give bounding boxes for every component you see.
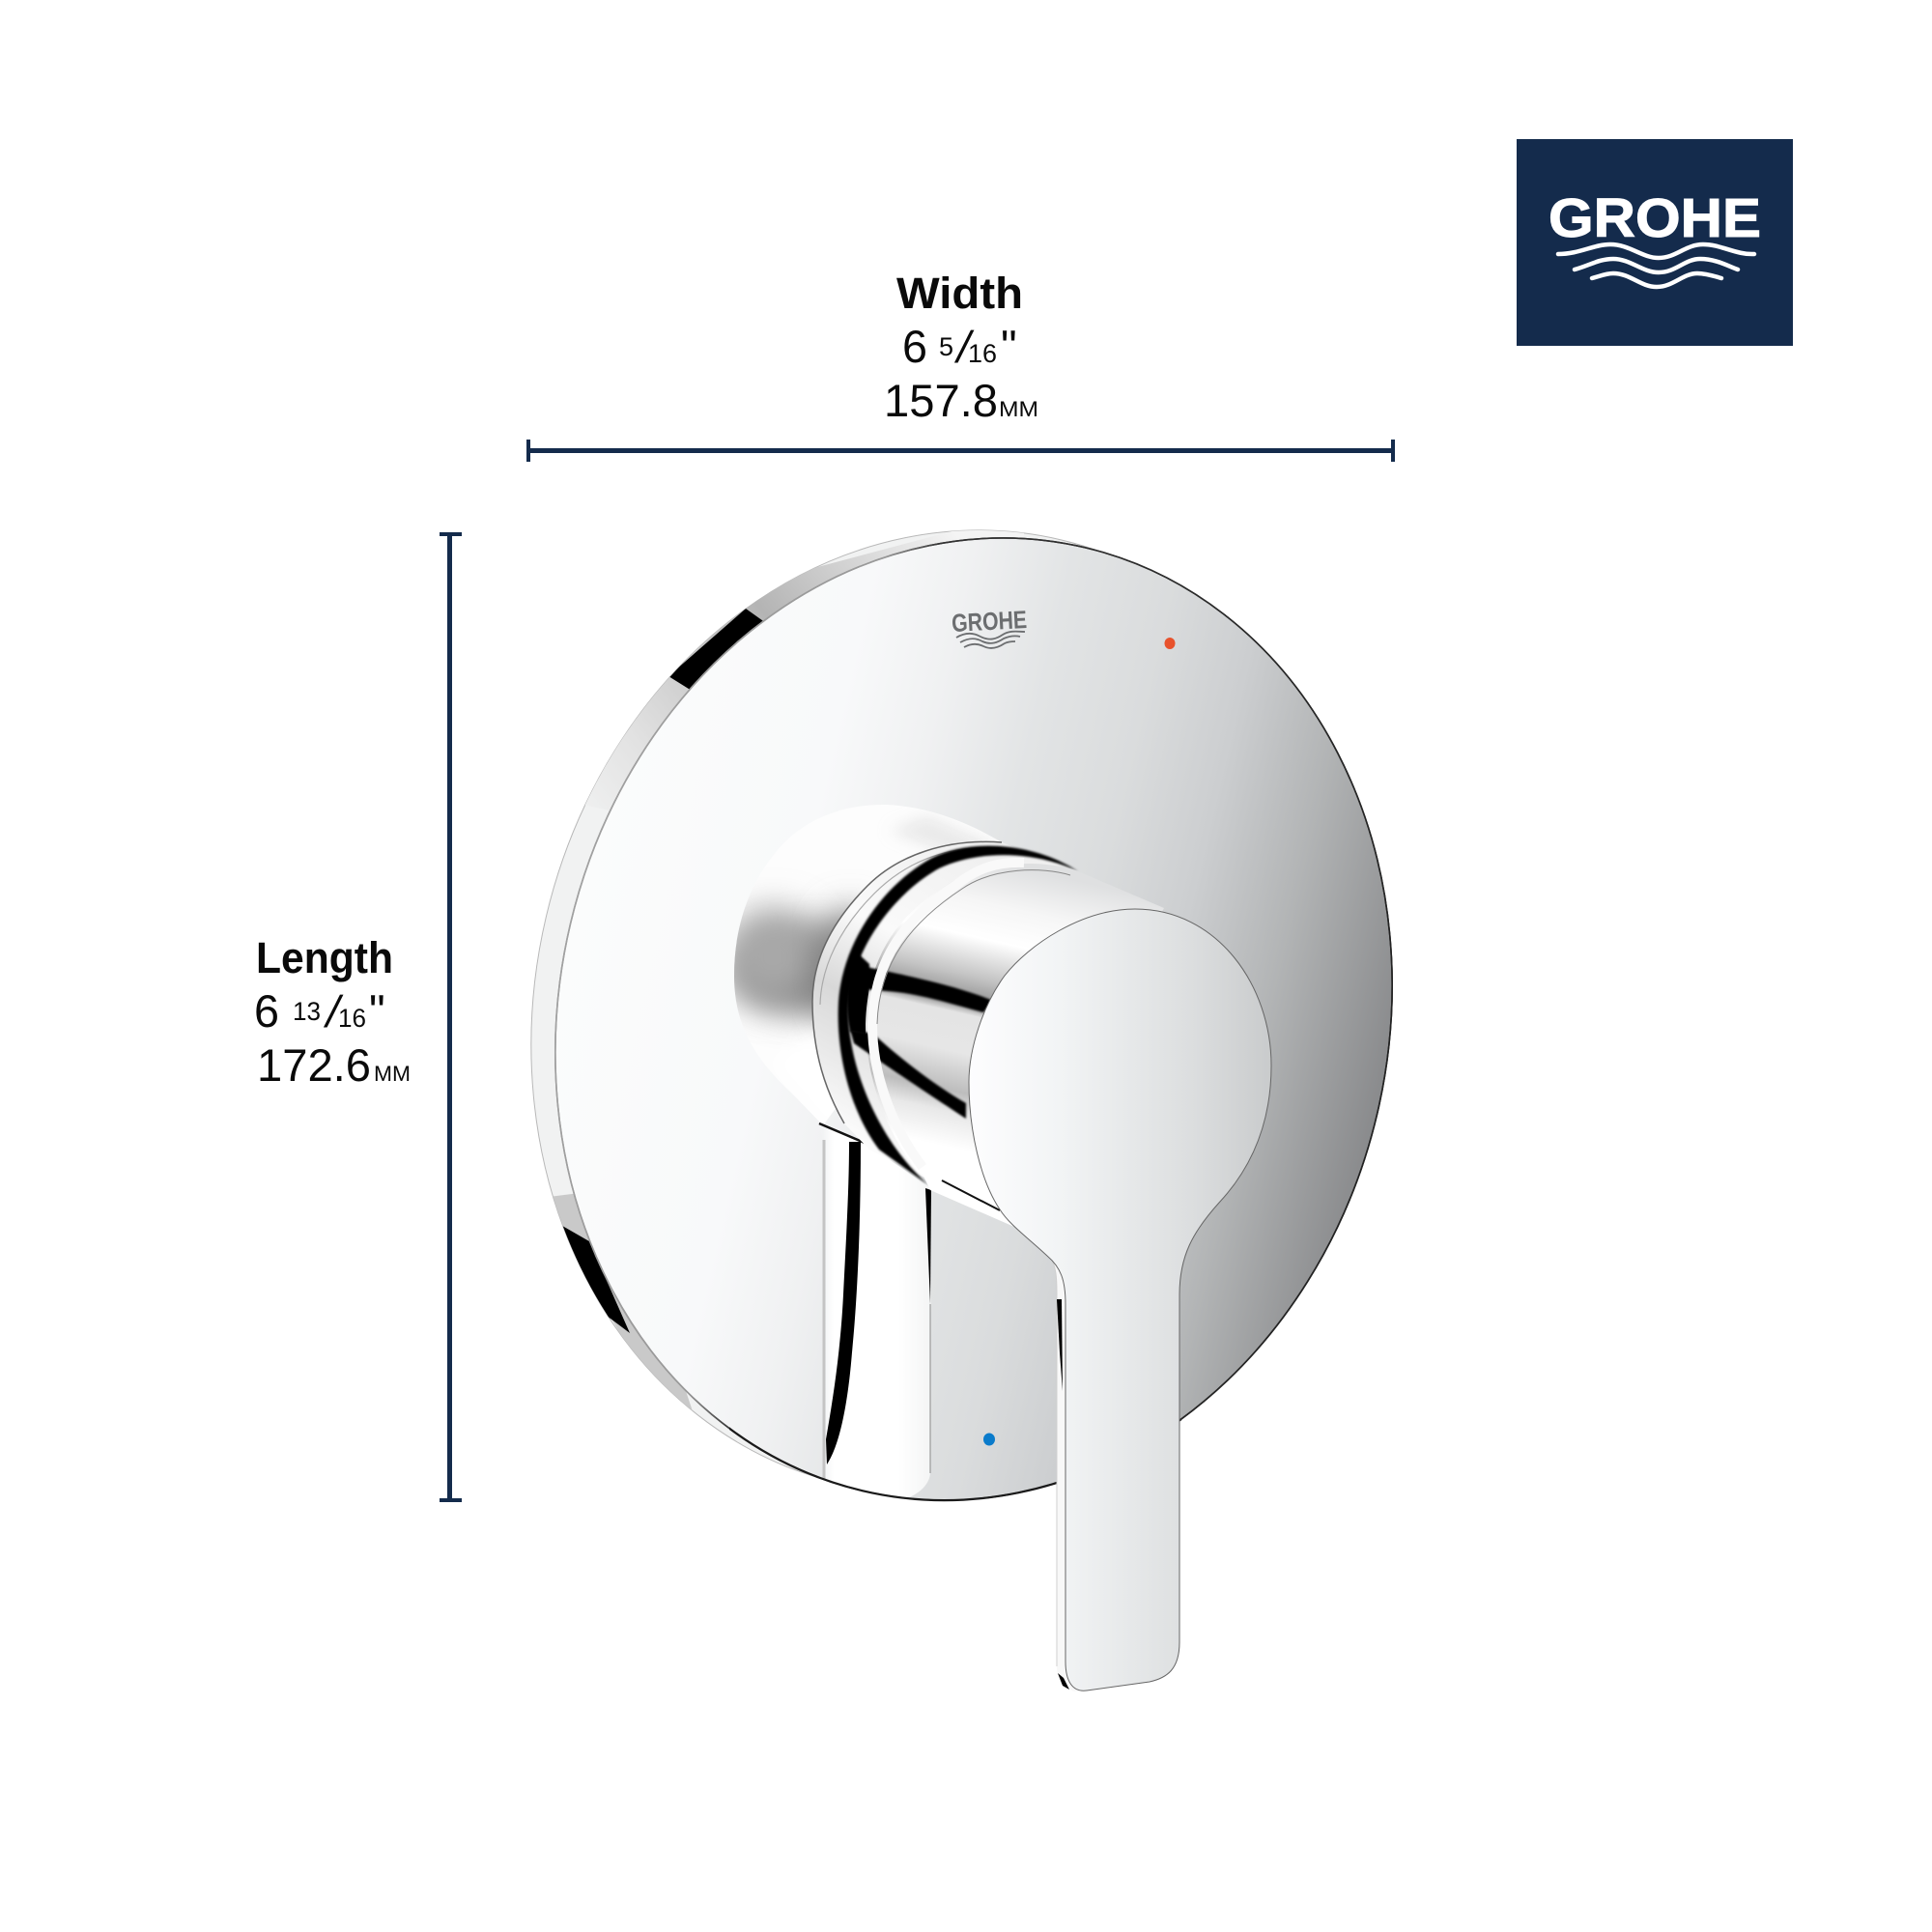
length label — [254, 933, 411, 1091]
length label: 16 — [338, 1004, 366, 1033]
barrel edge highlight — [872, 863, 1024, 1167]
logo waves — [1558, 244, 1754, 287]
barrel — [850, 863, 1164, 1210]
GROHE logo block — [1517, 139, 1793, 346]
mounting body — [724, 805, 1005, 1130]
plate face — [459, 452, 1489, 1586]
length label: / — [322, 987, 345, 1037]
black groove — [838, 846, 1078, 1184]
plate logo: GROHE — [951, 605, 1028, 638]
length label: Length — [256, 933, 393, 982]
collar ring — [812, 841, 1078, 1186]
width label: 6 — [902, 321, 927, 372]
hot indicator dot — [1165, 638, 1175, 649]
barrel reflection bands — [862, 966, 993, 1012]
handle face and lever — [969, 909, 1271, 1690]
cold indicator dot — [983, 1434, 995, 1445]
length label: 172.6 — [257, 1039, 371, 1091]
width label: 5 — [939, 332, 953, 361]
plate rim — [530, 529, 1095, 1478]
lower lip — [923, 1174, 1053, 1256]
length label: MM — [374, 1062, 411, 1086]
length label: 13 — [293, 997, 321, 1026]
length label: " — [369, 985, 385, 1037]
width label — [884, 269, 1038, 426]
product: valve trim — [530, 529, 1393, 1691]
width label: 157.8 — [884, 375, 998, 426]
width label: 16 — [968, 339, 997, 368]
plate logo — [951, 605, 1028, 648]
width label: " — [1001, 321, 1017, 372]
lever side strip — [1024, 1227, 1087, 1691]
lower stem — [819, 1122, 931, 1497]
length dimension line — [440, 532, 462, 1502]
length label: 6 — [254, 985, 279, 1037]
width label: MM — [999, 397, 1038, 421]
plate edge highlights — [554, 537, 1393, 1501]
width dimension line — [526, 440, 1395, 462]
logo wordmark: GROHE — [1548, 187, 1761, 249]
width label: Width — [896, 269, 1023, 318]
width label: / — [952, 323, 976, 372]
